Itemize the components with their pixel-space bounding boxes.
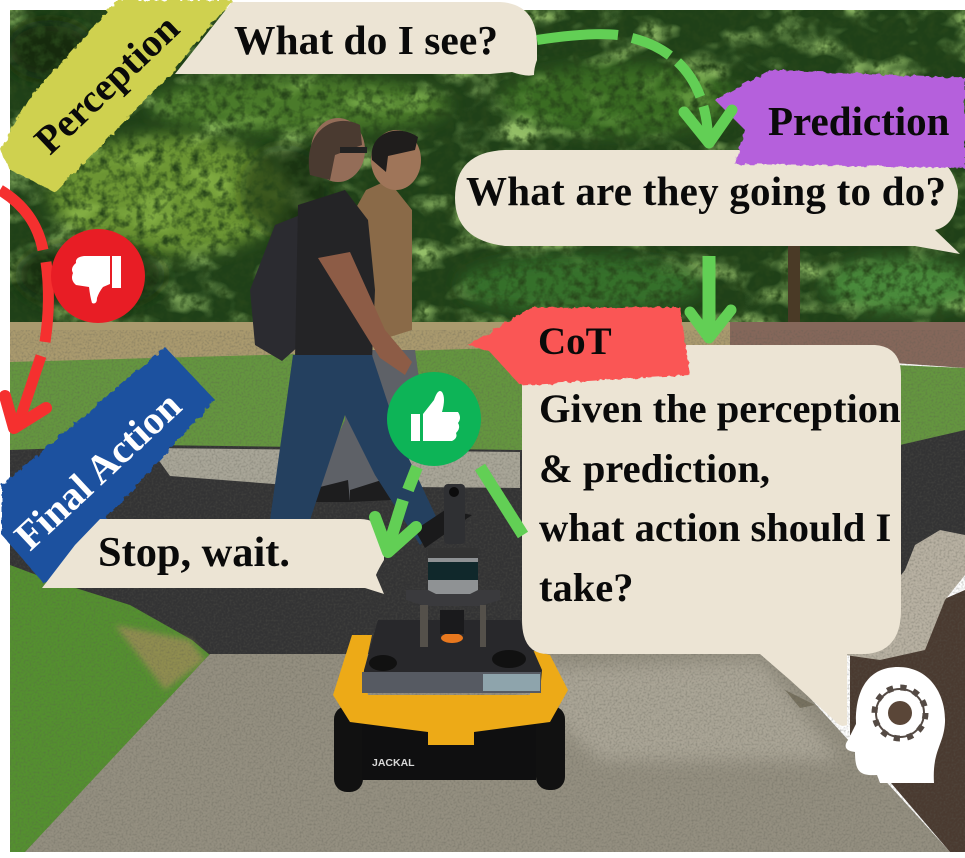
- label: prediction: [715, 70, 965, 168]
- arrow: CoT to thumbs up: [480, 467, 523, 535]
- person in black shirt with backpack: [250, 118, 472, 548]
- question text: what action should I: [539, 505, 891, 550]
- people walking: [250, 118, 472, 548]
- robot wheels: [334, 706, 565, 792]
- speech bubble: stop, wait: [42, 519, 384, 594]
- speech bubble: what do I see: [175, 2, 537, 76]
- icon: thumbs up: [387, 372, 481, 466]
- label: CoT: [468, 307, 690, 385]
- question text: & prediction,: [539, 446, 770, 491]
- speech bubble: CoT question: [522, 345, 911, 726]
- bubble text: What are they going to do?: [466, 168, 946, 214]
- label: final action: Final Action: [5, 382, 190, 559]
- arrow: red thumbs down loop: [0, 190, 49, 428]
- label: prediction: Prediction: [768, 98, 950, 144]
- robot deck: [362, 620, 542, 692]
- bubble text: Stop, wait.: [98, 529, 290, 576]
- robot name: JACKAL: [372, 757, 415, 769]
- robot body: [362, 715, 536, 780]
- person in brown shirt: [308, 130, 422, 502]
- robot: [333, 484, 568, 792]
- label: perception: Perception: [26, 6, 188, 163]
- question text: Given the perception: [539, 386, 900, 431]
- bubble text: What do I see?: [234, 17, 498, 63]
- arrow: what do I see to prediction: [537, 34, 732, 143]
- gear: [875, 688, 925, 738]
- label: CoT: CoT: [538, 320, 612, 363]
- label: final action: [2, 347, 215, 585]
- icon: thumbs down: [51, 229, 145, 323]
- label: perception: [0, 0, 232, 192]
- speech bubble: what are they going to do: [455, 150, 960, 254]
- robot sensor tower: [406, 590, 500, 606]
- question text: take?: [539, 565, 634, 610]
- icon: head with gear: [846, 667, 945, 783]
- arrow: thumbs up to stop: [375, 467, 417, 552]
- arrow: prediction to CoT: [690, 256, 731, 338]
